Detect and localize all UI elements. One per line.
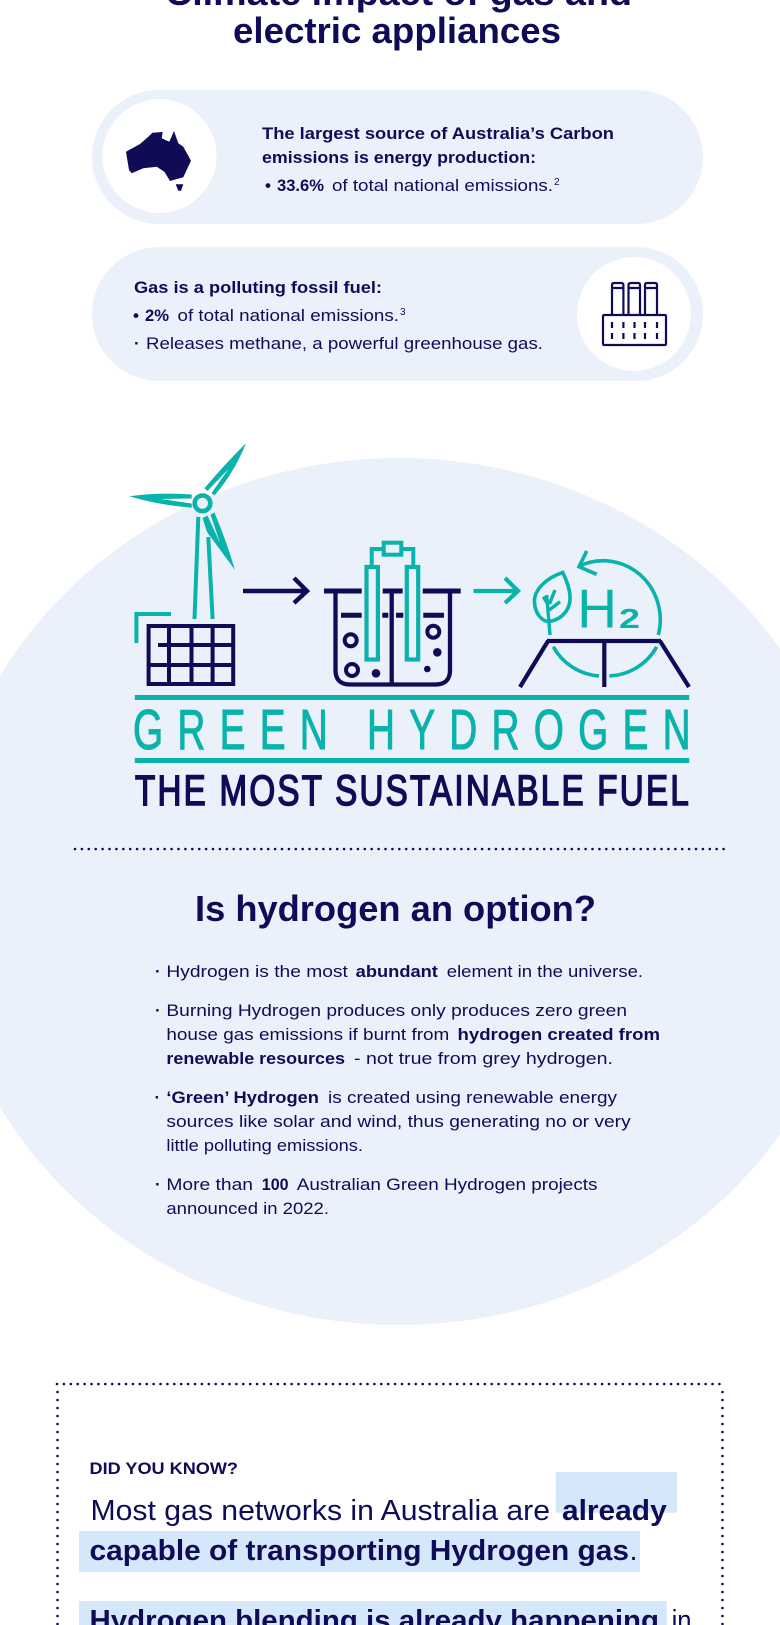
text: gas facts: · [134,334,140,353]
text block: hydrogen bullet list: abundant [356,962,438,981]
text: H2 symbol [577,578,640,640]
panel: largest source of emissions [92,90,703,224]
text: energy production emissions [262,124,614,195]
title: electric appliances [233,10,561,51]
subheading: the most sustainable fuel: THE MOST SUSTAINABLE FUEL [135,768,689,815]
icon: Australia map [102,99,216,213]
arrow: panel to electrolyser [243,578,307,603]
text: gas networks callout: already [562,1495,667,1527]
text block: hydrogen bullet list: · [155,962,161,981]
icon: hydrogen cycle with leaf [520,551,689,687]
text: gas facts: of total national emissions. [178,306,399,325]
text block: hydrogen bullet list: Hydrogen is the most [166,962,348,981]
text block: hydrogen bullet list: · [154,1088,160,1107]
text block: hydrogen bullet list: hydrogen created from [458,1025,660,1044]
text: energy production emissions: • [265,176,271,195]
text block: hydrogen bullet list: 100 [262,1175,289,1194]
arrow: electrolyser to hydrogen [474,578,518,603]
text: gas facts: • [133,306,139,325]
icon: wind turbine [129,443,246,619]
text block: hydrogen bullet list: Australian Green Hydrogen projects [297,1175,598,1194]
text: gas networks callout: capable of transporting Hydrogen gas [90,1535,629,1567]
icon: electrolysis beaker [324,543,461,685]
text block: hydrogen bullet list: sources like solar and wind, thus generating no or very [166,1112,631,1131]
text block: hydrogen bullet list: renewable resources [166,1049,345,1068]
panel: hydrogen background ellipse [0,458,780,1325]
heading: green hydrogen: GREEN HYDROGEN [133,699,691,762]
panel: gas is a polluting fossil fuel [92,247,703,381]
text: gas facts: 3 [400,307,406,318]
icon: solar panel [136,614,235,686]
text: energy production emissions: emissions is energy production: [262,148,536,167]
title [165,0,632,51]
text: H2 symbol: H [577,578,617,640]
text block: hydrogen bullet list: - not true from grey hydrogen. [354,1049,613,1068]
text: H2 symbol: 2 [619,603,640,634]
text block: hydrogen bullet list [154,962,660,1218]
text block: hydrogen bullet list: element in the universe. [447,962,643,981]
highlight: hydrogen blending [79,1601,667,1625]
text block: hydrogen bullet list: house gas emissions if burnt from [166,1025,449,1044]
text: energy production emissions: The largest source of Australia’s Carbon [262,124,614,143]
highlight: capable of transporting [79,1531,640,1572]
text: energy production emissions: 2 [554,177,560,188]
text block: hydrogen bullet list: ‘Green’ Hydrogen [166,1088,319,1107]
text: energy production emissions: of total national emissions. [332,176,553,195]
text: gas facts: 2% [145,306,169,325]
text: gas networks callout: . [630,1535,638,1567]
panel: did you know [57,1384,725,1625]
text block: hydrogen bullet list: · [155,1001,161,1020]
text block: hydrogen bullet list: is created using renewable energy [328,1088,618,1107]
highlight: already [556,1472,677,1513]
text: gas facts: Gas is a polluting fossil fuel: [134,278,382,297]
text block: hydrogen bullet list: little polluting emissions. [166,1136,363,1155]
illustration: green hydrogen process [129,443,689,687]
text: gas facts: Releases methane, a powerful greenhouse gas. [146,334,543,353]
icon: factory [577,257,691,371]
text block: hydrogen bullet list: · [155,1175,161,1194]
text: gas networks callout: Most gas networks in Australia are [90,1495,550,1527]
text: gas facts [133,278,543,353]
text: gas networks callout [90,1495,692,1625]
text block: hydrogen bullet list: More than [166,1175,253,1194]
text block: hydrogen bullet list: announced in 2022. [166,1199,329,1218]
heading: is hydrogen an option: Is hydrogen an option? [195,888,596,929]
text: energy production emissions: 33.6% [277,176,324,195]
label: did you know: DID YOU KNOW? [90,1459,238,1478]
text block: hydrogen bullet list: Burning Hydrogen produces only produces zero green [166,1001,627,1020]
